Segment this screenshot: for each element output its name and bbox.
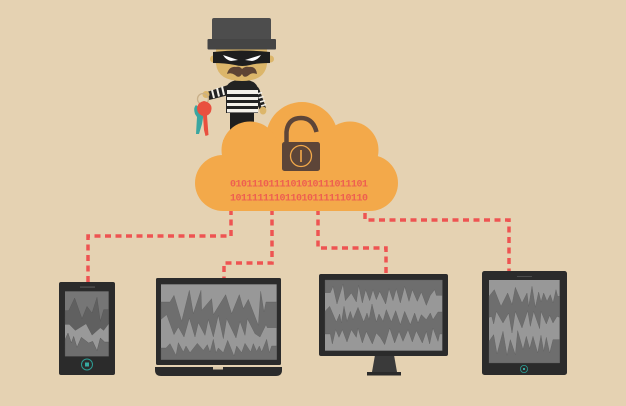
mask xyxy=(213,50,270,66)
legs xyxy=(230,113,254,135)
tablet home button xyxy=(520,365,528,373)
striped shirt xyxy=(226,80,258,113)
keys on ring xyxy=(194,94,212,136)
open padlock icon xyxy=(282,118,320,171)
arms and hands xyxy=(202,85,266,114)
thief character xyxy=(194,18,276,136)
binary text: 1011111110110101111110110 xyxy=(230,194,368,204)
laptop xyxy=(155,278,282,376)
laptop screen chart xyxy=(161,284,277,360)
binary text: 0101110111101010111011101 xyxy=(230,180,368,190)
phone home button xyxy=(82,359,92,370)
dashed connectors from cloud to devices xyxy=(88,209,509,282)
monitor screen chart xyxy=(325,280,442,351)
head xyxy=(210,48,274,81)
moustache xyxy=(227,67,257,77)
phone screen chart xyxy=(65,291,109,356)
tablet screen chart xyxy=(489,280,560,363)
tablet xyxy=(482,271,567,375)
desktop monitor xyxy=(319,274,448,376)
cloud xyxy=(195,102,398,211)
hat xyxy=(208,18,276,50)
binary text xyxy=(230,180,368,204)
smartphone xyxy=(59,282,115,375)
